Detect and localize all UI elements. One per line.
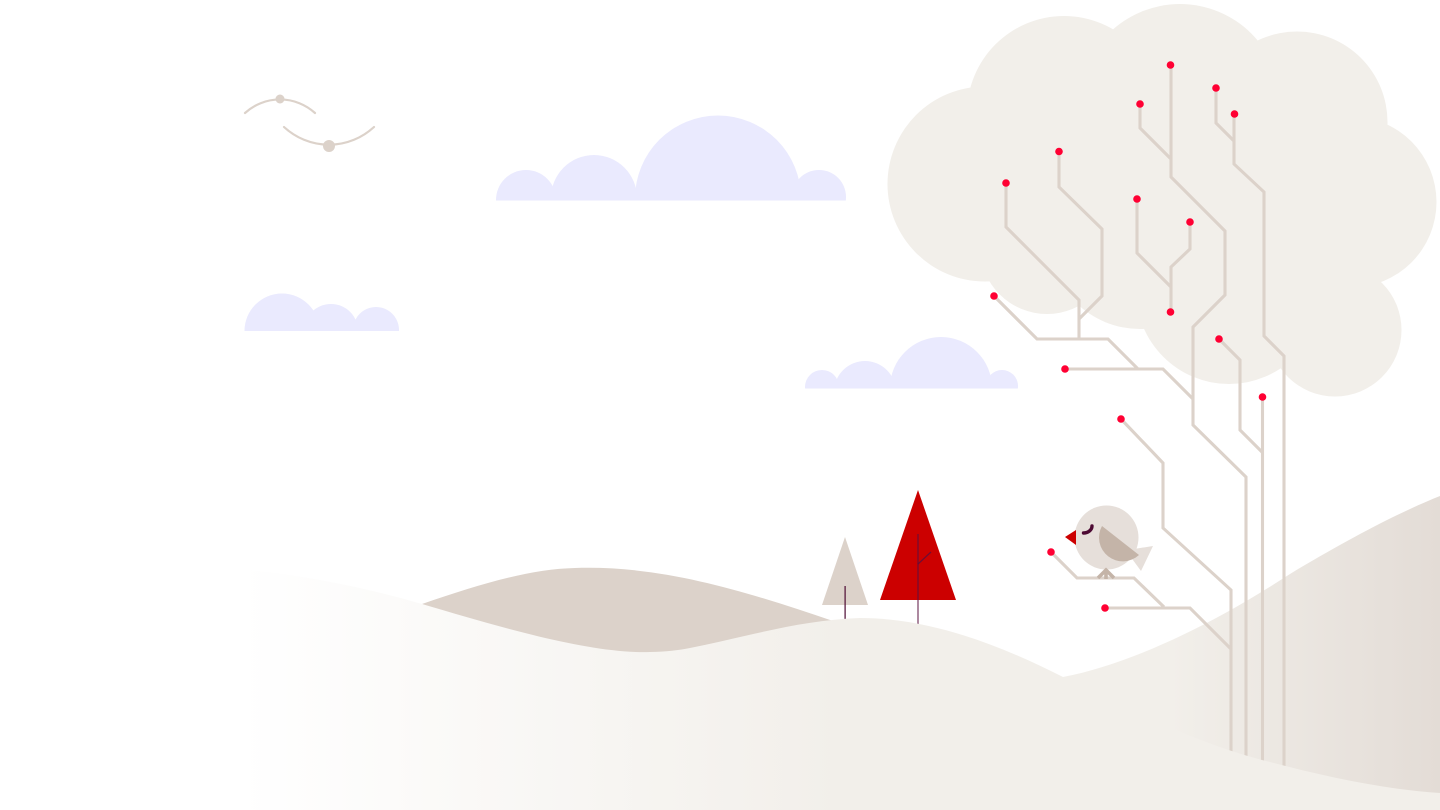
cloud: small left: [244, 294, 399, 331]
circuit branches: [994, 65, 1284, 780]
cloud: small centre right: [805, 337, 1018, 388]
background hill: [422, 568, 833, 660]
circuit nodes: [990, 61, 1266, 612]
perched bird: [1065, 506, 1153, 579]
flying birds: [245, 94, 374, 152]
cloud: large top centre: [496, 116, 846, 200]
foreground hill: [250, 570, 1440, 810]
right hill: [1063, 496, 1440, 810]
grey tree: [822, 537, 868, 622]
red tree: [880, 490, 956, 625]
tree canopy: [888, 4, 1436, 396]
